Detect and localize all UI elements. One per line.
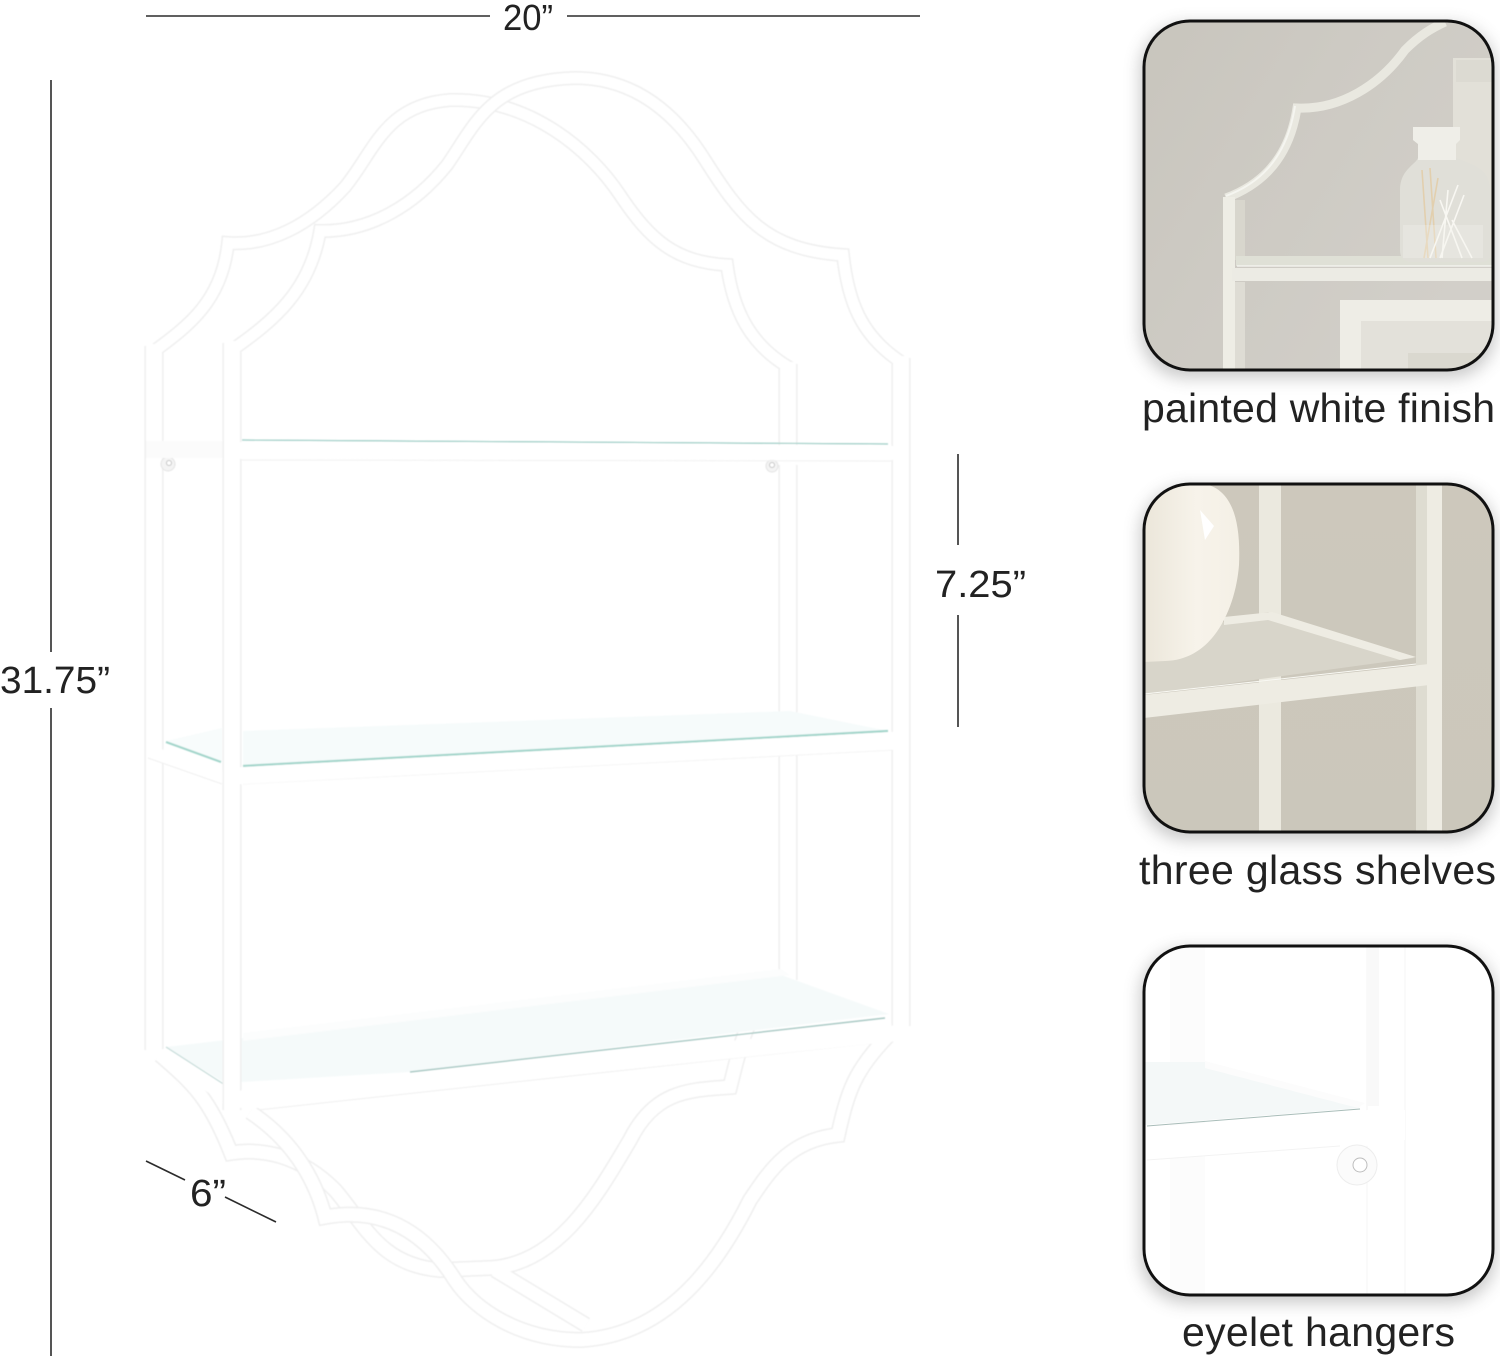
panel border (1144, 484, 1493, 832)
shelf unit illustration (146, 78, 908, 1340)
panel: eyelet hangers (1140, 946, 1496, 1303)
bottom glass shelf (146, 969, 908, 1110)
photo: shelf corner with eyelet (1144, 946, 1405, 1295)
front frame (225, 78, 908, 1340)
dimension: height 31.75 inches: 31.75” (0, 660, 110, 702)
photo: frame corner with jars (1144, 21, 1493, 372)
panel: painted white finish (1140, 21, 1496, 378)
dimension: depth 6 inches (146, 1161, 276, 1222)
dimension: depth 6 inches: 6” (190, 1173, 226, 1215)
dimension: shelf spacing 7.25 inches: 7.25” (935, 564, 1026, 606)
photo: shelf corner with vase (1144, 484, 1493, 832)
panel border (1144, 21, 1493, 370)
panel: three glass shelves (1140, 484, 1496, 840)
caption: three glass shelves: three glass shelves (1139, 847, 1496, 893)
rear frame (153, 100, 790, 1325)
middle glass shelf (148, 711, 893, 784)
caption: painted white finish: painted white finish (1142, 385, 1495, 431)
eyelet hangers (161, 457, 778, 472)
caption: eyelet hangers: eyelet hangers (1182, 1309, 1455, 1355)
top glass shelf (146, 440, 892, 461)
panel border (1144, 946, 1493, 1295)
